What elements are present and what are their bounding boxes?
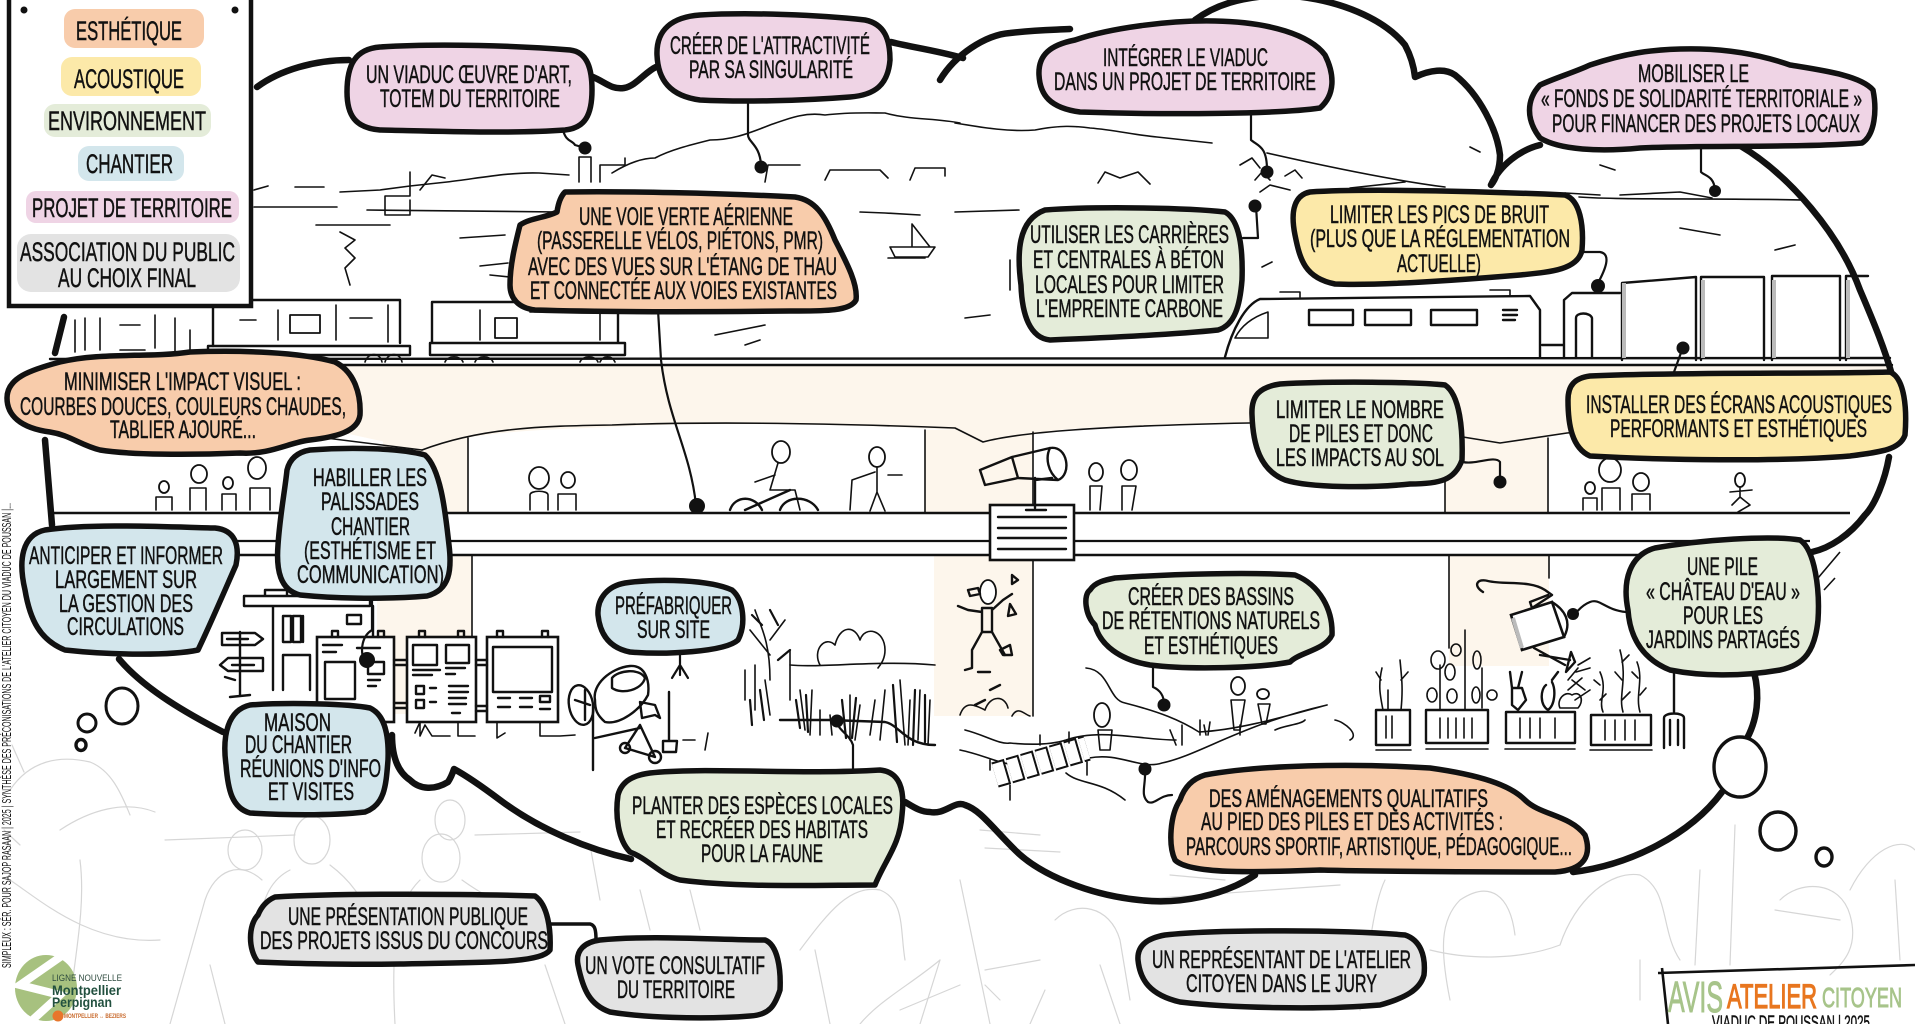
thought bubble right	[1714, 737, 1832, 866]
walkers in the garden	[1094, 677, 1270, 750]
bubble: attractivité: PAR SA SINGULARITÉ	[689, 55, 853, 84]
bubble: pile château d'eau	[1567, 538, 1818, 675]
bubble: espèces locales	[617, 714, 903, 886]
bubble: représentant dans le jury: CITOYEN DANS LE JURY	[1186, 970, 1377, 998]
site hut, signpost and information panels	[220, 590, 575, 738]
bubble: bassins de rétention: ET ESTHÉTIQUES	[1144, 631, 1278, 660]
bubble: aménagements qualitatifs	[1138, 762, 1587, 872]
bridge: viaduct structure and cream surfaces	[50, 358, 1892, 716]
bubble: carrières et centrales à béton	[1019, 200, 1262, 340]
legend: association du public: AU CHOIX FINAL	[58, 263, 196, 293]
bubble: écrans acoustiques	[1568, 342, 1906, 460]
bubble: pile château d'eau: POUR LES	[1683, 602, 1763, 630]
landscape: hills, shore and water	[254, 113, 1806, 345]
bubble: anticiper et informer	[22, 526, 237, 654]
bubble: projet de territoire	[1039, 21, 1332, 179]
icon: sailboat	[888, 224, 935, 258]
connector: présentation to vote	[549, 924, 596, 940]
bubble: pics de bruit: ACTUELLE)	[1397, 250, 1481, 278]
bubble: préfabriquer sur site: PRÉFABRIQUER	[615, 591, 732, 620]
bubble: voie verte aérienne: AVEC DES VUES SUR L'ÉTANG DE THAU	[528, 252, 837, 281]
icon: garden fork	[1664, 672, 1684, 748]
bubble: aménagements qualitatifs: PARCOURS SPORTIF, ARTISTIQUE, PÉDAGOGIQUE...	[1186, 832, 1572, 861]
bubble: aménagements qualitatifs: AU PIED DES PILES ET DES ACTIVITÉS :	[1201, 807, 1503, 836]
logo: ligne nouvelle Montpellier Perpignan: Perpignan	[52, 994, 112, 1010]
connector: maison du chantier to panel	[359, 598, 375, 668]
logo: ligne nouvelle Montpellier Perpignan: MONTPELLIER ↔ BEZIERS	[64, 1014, 126, 1020]
bubble: vote consultatif: DU TERRITOIRE	[617, 976, 735, 1004]
bubble: attractivité	[657, 14, 890, 174]
shared garden planters and plants	[1376, 630, 1652, 750]
bubble: carrières et centrales à béton: LOCALES POUR LIMITER	[1035, 271, 1224, 299]
thought bubble left	[76, 688, 138, 750]
bubble: habiller les palissades: COMMUNICATION)	[297, 561, 444, 589]
bubble: anticiper et informer: LARGEMENT SUR	[55, 566, 197, 594]
bubble: carrières et centrales à béton: L'EMPREINTE CARBONE	[1036, 295, 1223, 323]
legend: projet de territoire	[26, 191, 239, 223]
bubble: impact visuel: TABLIER AJOURÉ...	[110, 415, 256, 444]
icon: watering can	[1477, 580, 1590, 690]
bubble: présentation publique: DES PROJETS ISSUS DU CONCOURS	[260, 927, 548, 955]
legend: association du public: ASSOCIATION DU PUBLIC	[20, 237, 235, 267]
bubble: aménagements qualitatifs: DES AMÉNAGEMENTS QUALITATIFS	[1209, 784, 1488, 813]
bubble: anticiper et informer: LA GESTION DES	[59, 590, 193, 618]
bubble: pics de bruit: (PLUS QUE LA RÉGLEMENTATION	[1310, 224, 1570, 253]
logo: ligne nouvelle Montpellier Perpignan: LIGNE NOUVELLE	[52, 973, 122, 983]
freight train	[75, 300, 625, 362]
bubble: espèces locales: ET RECRÉER DES HABITATS	[656, 815, 868, 844]
bubble: pics de bruit: LIMITER LES PICS DE BRUIT	[1330, 201, 1549, 229]
bubble: nombre de piles: LIMITER LE NOMBRE	[1276, 396, 1444, 424]
bubble: bassins de rétention: DE RÉTENTIONS NATURELS	[1102, 606, 1320, 635]
bubble: anticiper et informer: ANTICIPER ET INFORMER	[29, 542, 223, 570]
stamp: avis atelier citoyen: ATELIER	[1727, 978, 1817, 1016]
bubble: pics de bruit	[1293, 190, 1606, 293]
bubble: bassins de rétention: CRÉER DES BASSINS	[1128, 582, 1294, 611]
bubble: impact visuel: MINIMISER L'IMPACT VISUEL :	[64, 368, 301, 396]
bubble: représentant dans le jury	[1138, 931, 1424, 1008]
bubble: attractivité: CRÉER DE L'ATTRACTIVITÉ	[670, 31, 870, 60]
bubble: pile château d'eau: « CHÂTEAU D'EAU »	[1646, 577, 1800, 606]
bubble: carrières et centrales à béton: ET CENTRALES À BÉTON	[1033, 245, 1224, 274]
bubble: voie verte aérienne: UNE VOIE VERTE AÉRIENNE	[579, 202, 793, 231]
bubble: préfabriquer sur site	[598, 580, 743, 678]
bubble: espèces locales: PLANTER DES ESPÈCES LOCALES	[632, 791, 893, 820]
bubble: pile château d'eau: UNE PILE	[1687, 553, 1758, 581]
people on the walkway	[156, 441, 1752, 512]
bubble: présentation publique	[250, 894, 550, 964]
icon: concrete mixer	[566, 666, 708, 770]
bubble: nombre de piles: DE PILES ET DONC	[1289, 420, 1433, 448]
bubble: maison du chantier: ET VISITES	[268, 778, 354, 806]
bubble: voie verte aérienne: (PASSERELLE VÉLOS, PIÉTONS, PMR)	[537, 226, 823, 255]
bubble: viaduc oeuvre d'art: UN VIADUC ŒUVRE D'ART,	[366, 61, 572, 89]
legend: chantier: CHANTIER	[86, 149, 173, 179]
panel: legend	[9, 0, 251, 306]
bubble: habiller les palissades: PALISSADES	[321, 488, 419, 516]
bubble: habiller les palissades	[278, 448, 450, 598]
legend: environnement: ENVIRONNEMENT	[48, 106, 206, 136]
legend: acoustique	[61, 57, 201, 96]
bubble: projet de territoire: DANS UN PROJET DE TERRITOIRE	[1054, 68, 1316, 96]
background: audience sketch	[4, 745, 1915, 1024]
bubble: maison du chantier: DU CHANTIER	[245, 731, 352, 759]
hatching beside the cloud	[1818, 552, 1840, 590]
legend: esthétique: ESTHÉTIQUE	[76, 16, 182, 46]
bubble: espèces locales: POUR LA FAUNE	[701, 840, 823, 868]
bubble: anticiper et informer: CIRCULATIONS	[67, 613, 184, 641]
bubble: impact visuel	[7, 351, 360, 454]
footbridge over the pond	[990, 732, 1087, 800]
vegetation and ponds	[745, 610, 1353, 800]
logo: ligne nouvelle Montpellier Perpignan: Montpellier	[52, 982, 122, 998]
legend: esthétique	[64, 9, 204, 48]
bubble: maison du chantier	[225, 704, 388, 815]
icon: telescope	[980, 448, 1066, 510]
bubble: voie verte aérienne: ET CONNECTÉE AUX VOIES EXISTANTES	[530, 276, 837, 305]
legend: chantier	[78, 146, 184, 181]
stamp: avis atelier citoyen	[1658, 965, 1915, 1024]
bubble: projet de territoire: INTÉGRER LE VIADUC	[1103, 43, 1268, 72]
bubble: représentant dans le jury: UN REPRÉSENTANT DE L'ATELIER	[1152, 945, 1411, 974]
bubble: maison du chantier: RÉUNIONS D'INFO	[240, 754, 381, 783]
footbridge gate on the walkway	[990, 505, 1074, 560]
bubble: impact visuel: COURBES DOUCES, COULEURS CHAUDES,	[20, 393, 346, 421]
legend: environnement	[44, 104, 211, 137]
legend: acoustique: ACOUSTIQUE	[74, 64, 184, 94]
bubble: préfabriquer sur site: SUR SITE	[637, 616, 710, 644]
bubble: voie verte aérienne	[510, 192, 856, 514]
legend: association du public	[17, 234, 240, 293]
bubble: pile château d'eau: JARDINS PARTAGÉS	[1646, 625, 1800, 654]
bubble: habiller les palissades: HABILLER LES	[313, 464, 427, 492]
bubble: maison du chantier: MAISON	[264, 709, 331, 737]
climber on the pier	[958, 575, 1030, 716]
stamp: avis atelier citoyen: AVIS	[1668, 973, 1723, 1022]
bubble: fonds de solidarité	[1530, 49, 1875, 197]
bubble: viaduc oeuvre d'art: TOTEM DU TERRITOIRE	[380, 85, 560, 113]
bubble: nombre de piles: LES IMPACTS AU SOL	[1276, 444, 1444, 472]
logo: ligne nouvelle Montpellier Perpignan	[15, 953, 126, 1024]
legend: projet de territoire: PROJET DE TERRITOIRE	[32, 193, 232, 223]
bubble: bassins de rétention	[1086, 574, 1332, 712]
bubble: présentation publique: UNE PRÉSENTATION PUBLIQUE	[288, 902, 528, 931]
bubble: habiller les palissades: (ESTHÉTISME ET	[304, 536, 436, 565]
bubble: vote consultatif: UN VOTE CONSULTATIF	[585, 952, 765, 980]
bubble: viaduc oeuvre d'art	[347, 45, 592, 154]
bubble: nombre de piles	[1252, 382, 1506, 488]
bubble: fonds de solidarité: MOBILISER LE	[1638, 60, 1749, 88]
passenger train and acoustic screens	[1225, 276, 1868, 360]
bubble: carrières et centrales à béton: UTILISER LES CARRIÈRES	[1030, 220, 1229, 249]
bubble: habiller les palissades: CHANTIER	[331, 513, 410, 541]
bubble: vote consultatif	[577, 938, 780, 1018]
